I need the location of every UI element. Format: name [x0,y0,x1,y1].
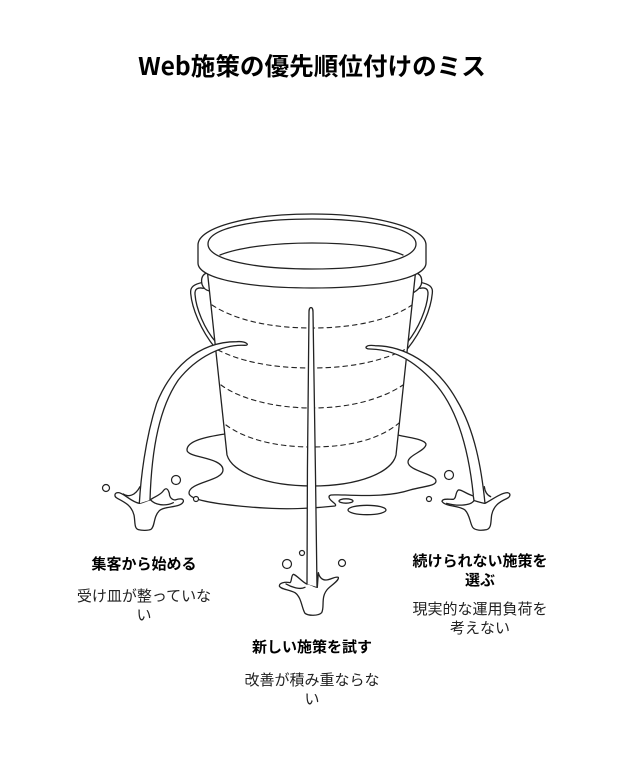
description [244,669,380,709]
description: 考えない [450,617,510,638]
water stream left [139,342,247,503]
puddle ellipse small [339,499,353,503]
splash center [279,573,338,615]
description [412,598,548,638]
description: い [304,688,320,709]
puddle [187,434,436,515]
heading: 集客から始める [91,553,196,574]
bucket handle left [191,273,216,348]
description: 受け皿が整っていな [77,585,211,606]
bucket body [207,268,416,486]
label: right [412,550,548,638]
water stream center [307,308,317,587]
title: Web施策の優先順位付けのミス [138,47,486,83]
water stream right [366,345,485,503]
description: 改善が積み重ならな [244,669,380,690]
heading: 新しい施策を試す [252,636,372,657]
bucket rim [198,214,426,288]
splash left [115,487,183,530]
description [77,585,211,625]
heading [412,550,548,590]
description: い [136,604,152,625]
puddle ellipse large [348,505,386,515]
bucket dashed level lines [212,305,412,447]
droplets [102,470,454,568]
heading: 選ぶ [465,569,495,590]
description: 現実的な運用負荷を [412,598,548,619]
heading: 続けられない施策を [412,550,548,571]
label: left [77,553,211,625]
label: center [244,636,380,709]
splash right [442,487,510,530]
bucket handle right [407,273,432,349]
